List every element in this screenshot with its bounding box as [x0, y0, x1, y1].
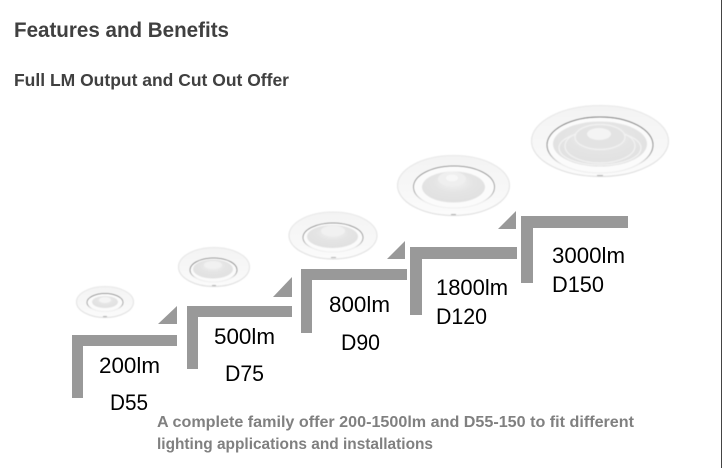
- step bracket: [301, 269, 407, 333]
- label: D120: D120: [436, 304, 487, 329]
- step bracket: [72, 335, 177, 398]
- step 5: 3000lm D150: [521, 106, 668, 297]
- step bracket: [410, 247, 517, 315]
- icon: downlight D150: [532, 106, 668, 176]
- label: 500lm: 500lm: [214, 324, 275, 349]
- step bracket: [187, 306, 292, 369]
- label: D75: D75: [225, 361, 264, 386]
- label: 3000lm: 3000lm: [552, 243, 625, 268]
- arrow triangle: [498, 211, 516, 229]
- icon: downlight D90: [289, 212, 377, 259]
- icon: downlight D55: [76, 286, 134, 318]
- step 3: 800lm D90: [289, 212, 407, 355]
- right edge line: [721, 0, 722, 468]
- step 4: 1800lm D120: [398, 156, 517, 329]
- arrow triangle: [387, 241, 405, 259]
- label: D90: D90: [341, 330, 380, 355]
- icon: downlight D75: [178, 248, 250, 286]
- caption: lighting applications and installations: [157, 436, 433, 453]
- subtitle: Full LM Output and Cut Out Offer: [14, 70, 289, 90]
- label: 1800lm: 1800lm: [436, 275, 508, 300]
- label: D150: D150: [552, 272, 604, 297]
- caption: [157, 414, 635, 453]
- step bracket: [521, 216, 628, 283]
- title: Features and Benefits: [14, 19, 229, 42]
- arrow triangle: [273, 277, 292, 297]
- label: 800lm: 800lm: [329, 292, 390, 317]
- step 1: 200lm D55: [72, 286, 177, 415]
- caption: A complete family offer 200-1500lm and D55-150 to fit different: [157, 414, 635, 431]
- label: D55: D55: [110, 390, 148, 415]
- step 2: 500lm D75: [178, 248, 292, 386]
- icon: downlight D120: [398, 156, 510, 216]
- label: 200lm: 200lm: [99, 353, 160, 378]
- arrow triangle: [158, 306, 177, 324]
